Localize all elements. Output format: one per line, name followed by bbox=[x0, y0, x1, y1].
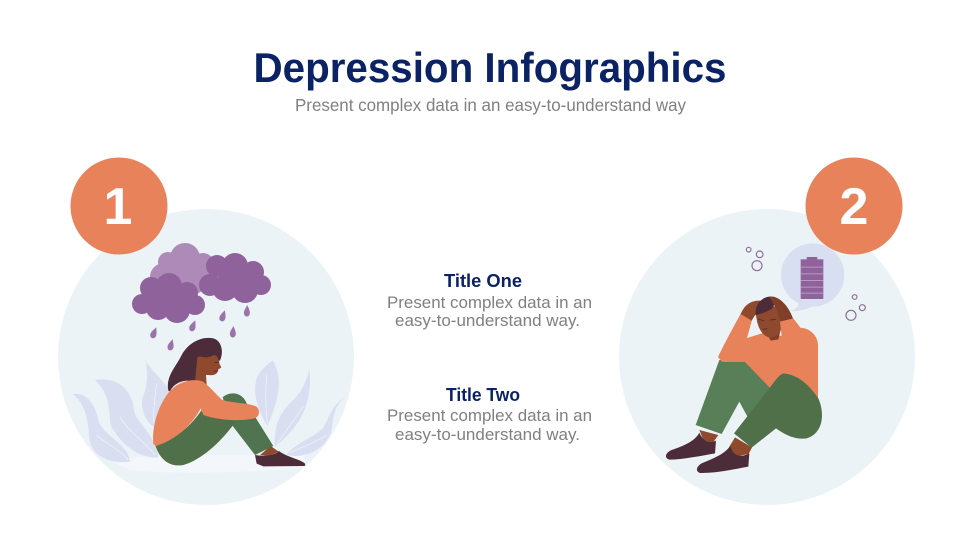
right forearm bbox=[780, 318, 809, 350]
back leg bbox=[696, 360, 771, 434]
text block: title one: Title One bbox=[444, 271, 522, 291]
legs and shoes bbox=[666, 360, 771, 473]
text block: title two: Title Two bbox=[446, 385, 520, 405]
back shoe bbox=[666, 433, 716, 460]
text block: title one: Present complex data in an bbox=[387, 294, 592, 312]
icon: leaves bbox=[73, 361, 345, 462]
head and hands bbox=[741, 296, 809, 350]
far leg bbox=[223, 393, 273, 455]
ankle bbox=[260, 446, 279, 456]
thought bubble with battery bbox=[781, 243, 844, 311]
eyes and mouth bbox=[758, 319, 776, 329]
background circle left bbox=[58, 209, 354, 505]
back cloud bbox=[150, 243, 214, 295]
eye bbox=[214, 362, 219, 371]
man figure bbox=[666, 296, 822, 473]
rain drops bbox=[149, 305, 250, 351]
left cloud bbox=[132, 273, 205, 323]
title: Depression Infographics bbox=[254, 44, 726, 91]
badge: number 1: 1 bbox=[104, 178, 132, 236]
subtitle: Present complex data in an easy-to-understand way bbox=[295, 95, 686, 115]
ground shadow bbox=[112, 455, 305, 473]
panel: right illustration bbox=[619, 209, 915, 505]
thought circles bbox=[746, 247, 865, 320]
face and neck bbox=[195, 355, 221, 385]
badge: number 2: 2 bbox=[840, 178, 868, 236]
woman figure bbox=[153, 338, 305, 466]
badge: number 1 bbox=[70, 158, 168, 254]
shoe bbox=[255, 451, 305, 466]
torso bbox=[718, 313, 818, 398]
background circle right bbox=[619, 209, 915, 505]
text block: title two: easy-to-understand way. bbox=[395, 426, 580, 444]
right hand bbox=[769, 296, 793, 325]
right cloud bbox=[199, 253, 271, 303]
text block: title two bbox=[387, 385, 592, 444]
icon: rain clouds bbox=[132, 243, 271, 351]
face bbox=[756, 305, 782, 337]
front shoe bbox=[697, 446, 749, 473]
neck bbox=[765, 330, 781, 341]
ankles bbox=[699, 430, 718, 444]
front leg bbox=[734, 373, 822, 448]
hair bbox=[168, 338, 222, 391]
hair bbox=[755, 297, 774, 315]
text block: title one bbox=[387, 271, 592, 330]
badge: number 2 bbox=[806, 158, 902, 254]
left hand bbox=[741, 301, 761, 321]
text block: title two: Present complex data in an bbox=[387, 407, 592, 425]
text block: title one: easy-to-understand way. bbox=[395, 312, 580, 330]
torso and arm bbox=[153, 380, 259, 446]
near leg and hips bbox=[155, 410, 237, 465]
panel: left illustration bbox=[58, 209, 354, 505]
